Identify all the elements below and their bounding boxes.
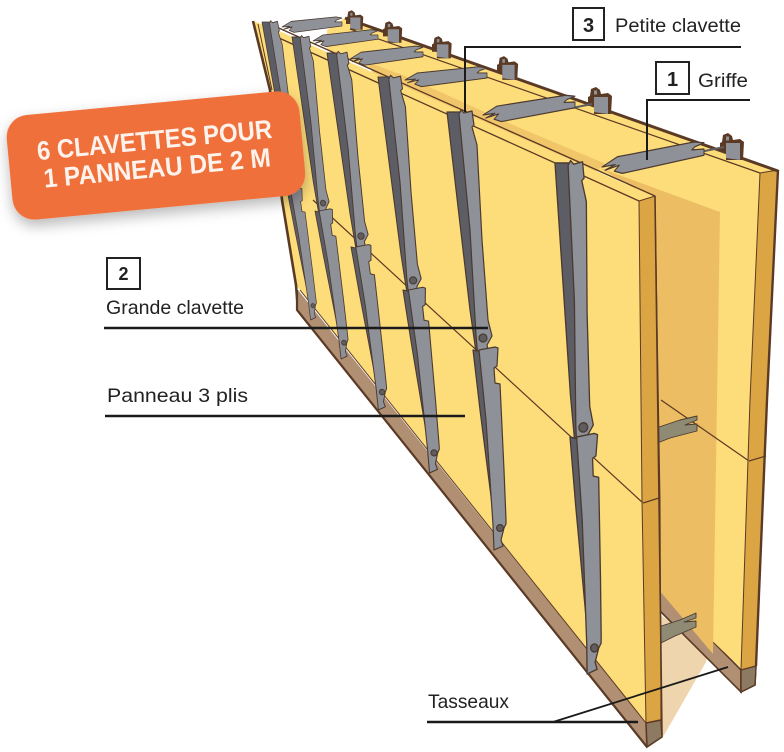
- tasseau: front sill: [297, 290, 662, 747]
- grandes clavettes: [262, 21, 606, 674]
- floor shadow: [658, 615, 708, 737]
- callout: panneau 3 plis: Panneau 3 plis: [107, 385, 248, 407]
- callout: tasseaux: [427, 667, 728, 722]
- griffes between panels: [650, 416, 697, 646]
- callout: griffe: [647, 62, 750, 160]
- callout: petite clavette: Petite clavette: [615, 16, 741, 37]
- back sill: [659, 587, 756, 692]
- orange badge: 1 PANNEAU DE 2 M: [42, 142, 272, 194]
- callout: griffe: Griffe: [698, 71, 748, 92]
- back panel: [327, 18, 778, 692]
- orange badge: 6 CLAVETTES POUR: [36, 114, 273, 166]
- front panel: [253, 21, 655, 723]
- griffe anchors on the back edge: [346, 10, 744, 160]
- callout: petite clavette: [465, 8, 741, 112]
- callout: griffe: 1: [667, 69, 678, 91]
- griffes on top of the panels: [282, 16, 724, 177]
- callout: grande clavette: Grande clavette: [106, 297, 244, 319]
- orange badge: [5, 89, 307, 222]
- callout: grande clavette: [104, 258, 488, 328]
- callout: grande clavette: 2: [118, 264, 129, 284]
- callout: petite clavette: 3: [583, 15, 594, 37]
- callout: tasseaux: Tasseaux: [428, 691, 509, 713]
- front panel edge: [639, 196, 662, 735]
